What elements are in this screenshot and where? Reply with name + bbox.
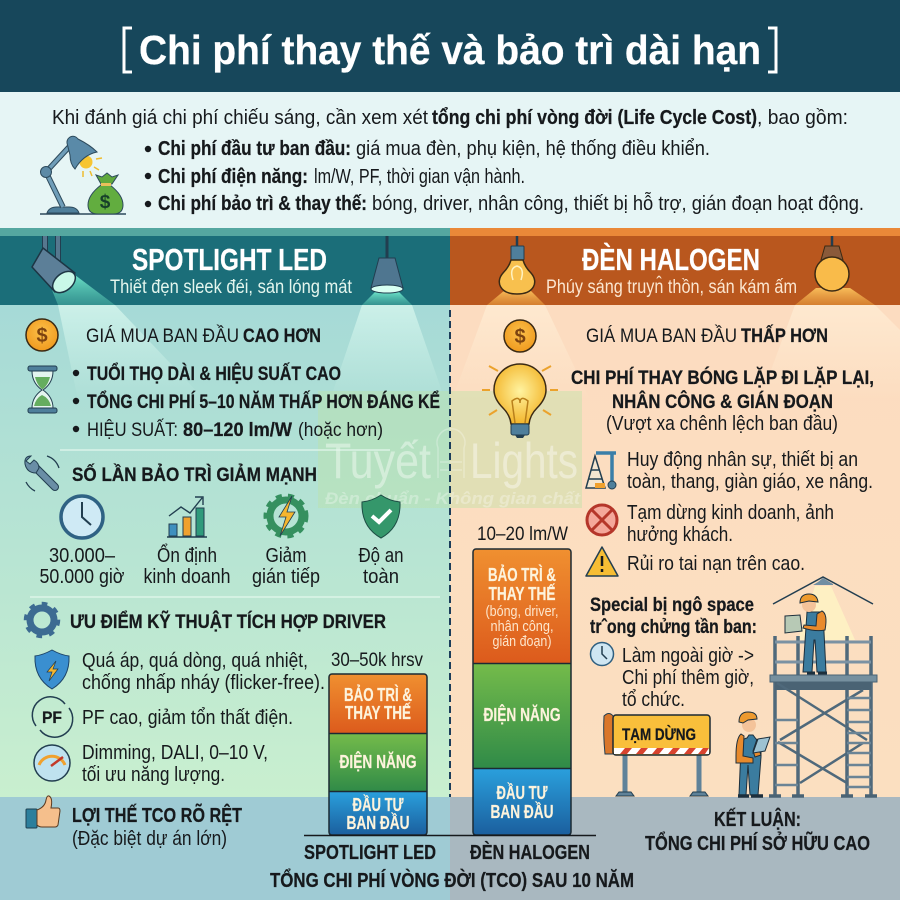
heading: den halogen: ĐÈN HALOGEN: [582, 242, 760, 277]
icon: shield: [362, 495, 400, 538]
bullet list: cost components: lm/W, PF, thời gian vận hành.: [314, 166, 525, 188]
light beams: spotlight: [52, 275, 445, 400]
subheading: halogen: Phúy sáng truyn̂ thồn, sán kám ấm: [546, 276, 797, 298]
group: hours: 30.000–: [49, 545, 116, 567]
icon: frosted bulb: [815, 236, 849, 291]
group: business stability: Ổn định: [157, 543, 217, 567]
bullet list: spotlight benefits: (hoặc hơn): [298, 420, 383, 441]
watermark: Lights: [470, 433, 578, 489]
icon: growth chart: [167, 497, 207, 537]
bar: spotlight led: BẢO TRÌ &: [344, 684, 412, 705]
icon: dimming gauge: [34, 745, 70, 781]
icon: warning triangle: [586, 547, 618, 576]
heading: driver advantages: ƯU ĐIỂM KỸ THUẬT TÍCH HỢP DRIVER: [70, 611, 386, 633]
scaffold: [769, 636, 877, 797]
text: dimming: tối ưu năng lượng.: [82, 764, 225, 786]
intro sentence: [52, 107, 848, 129]
text: special note: trˆong chửng tần ban:: [590, 617, 757, 638]
icon: power factor: PF: [42, 708, 62, 727]
panel: left column background: [0, 305, 450, 797]
icon: coin: [26, 319, 58, 351]
text: conclusion: [645, 807, 870, 855]
panel: introduction: [0, 92, 900, 228]
light beams: halogen: [452, 288, 900, 400]
bar: den halogen: (bóng, driver,: [486, 603, 558, 620]
text: lower price: GIÁ MUA BAN ĐẦU: [586, 325, 737, 347]
group: indirect savings: Giảm: [266, 545, 306, 567]
icon: thumbs up: [26, 796, 60, 828]
title: Chi phí thay thế và bảo trì dài hạn: [139, 27, 761, 73]
text: accident risk: Rủi ro tai nạn trên cao.: [627, 553, 805, 575]
text: lower price: [586, 325, 828, 347]
bar: spotlight led: THAY THẾ: [345, 702, 411, 723]
text: overtime: tổ chức.: [622, 689, 685, 711]
heading: spotlight led: SPOTLIGHT LED: [132, 242, 327, 277]
panel: title bar: [0, 0, 900, 92]
watermark: Tuyết: [325, 433, 431, 489]
text: special note: [590, 595, 757, 638]
panel: halogen header: [450, 228, 900, 400]
group: business stability: [144, 497, 230, 588]
chart: total cost of ownership stacked bars: [270, 524, 634, 892]
icon: clock: [61, 496, 103, 538]
bar: den halogen: nhân công,: [490, 618, 554, 635]
ceiling with lamp: [773, 577, 873, 640]
bullet list: cost components: [145, 138, 864, 215]
text: repeated replacement cost: CHI PHÍ THAY BÓNG LẶP ĐI LẶP LẠI,: [571, 367, 874, 389]
icon: gear with lightning: [266, 496, 306, 536]
bar: den halogen: 10–20 lm/W: [477, 524, 568, 545]
divider: dashed center line: [449, 310, 451, 797]
icon: protection shield: [35, 650, 69, 689]
text: protections: chống nhấp nháy (flicker-free).: [82, 672, 325, 694]
bullet list: cost components: giá mua đèn, phụ kiện, hệ thống điều khiển.: [356, 138, 710, 160]
text: repeated replacement cost: [571, 367, 874, 435]
bullet list: spotlight benefits: HIỆU SUẤT:: [87, 419, 178, 441]
icon: glowing light bulb: [482, 364, 558, 438]
bullet list: cost components: Chi phí điện năng:: [158, 166, 308, 188]
text: repeated replacement cost: NHÂN CÔNG & GIÁN ĐOẠN: [612, 391, 833, 413]
group: hours: [40, 496, 124, 588]
text: overtime: Làm ngoài giờ ->: [622, 645, 754, 667]
illustration: pause barrier sign: TẠM DỪNG: [622, 725, 696, 744]
panel: right bottom band: [450, 797, 900, 900]
bullet list: spotlight benefits: TỔNG CHI PHÍ 5–10 NĂM THẤP HƠN ĐÁNG KỂ: [87, 391, 440, 413]
text: tco advantage: [72, 803, 242, 850]
bullet list: cost components: bóng, driver, nhân công, thiết bị hỗ trợ, gián đoạn hoạt động.: [372, 192, 864, 215]
group: halogen price: [504, 320, 828, 352]
text: power factor: PF cao, giảm tổn thất điện.: [82, 707, 293, 729]
icon: stop sign: [587, 505, 617, 535]
text: special note: Special bị ngô space: [590, 595, 754, 616]
bullet list: spotlight benefits: TUỔI THỌ DÀI & HIỆU SUẤT CAO: [87, 363, 341, 385]
text: higher price: CAO HƠN: [243, 326, 321, 347]
illustration: worker on ground: [736, 712, 770, 796]
text: business pause: hưởng khách.: [627, 524, 733, 546]
icon: ladder and lift: [586, 453, 616, 489]
group: safety: [358, 495, 404, 588]
icon: track spotlight: [32, 236, 79, 297]
group: indirect savings: [252, 496, 320, 588]
heading: maintenance reduced: SỐ LẦN BẢO TRÌ GIẢM MẠNH: [72, 464, 317, 486]
bullet list: spotlight benefits: 80–120 lm/W: [183, 420, 292, 441]
text: protections: [82, 650, 325, 694]
icon: power factor: [32, 697, 73, 737]
text: lower price: THẤP HƠN: [741, 325, 828, 347]
group: business stability: kinh doanh: [144, 566, 230, 588]
text: dimming: Dimming, DALI, 0–10 V,: [82, 742, 268, 764]
bullet list: spotlight benefits: [73, 363, 440, 441]
text: overtime: Chi phí thêm giờ,: [622, 667, 754, 689]
icon: wrench: [25, 456, 59, 491]
icon: hourglass: [28, 366, 57, 413]
watermark: [318, 391, 582, 508]
bullet list: cost components: Chi phí bảo trì & thay thế:: [158, 193, 367, 215]
text: tco advantage: LỢI THẾ TCO RÕ RỆT: [72, 803, 242, 827]
worker: [785, 594, 827, 673]
text: overtime: [622, 645, 754, 711]
bar: spotlight led: [329, 650, 427, 835]
text: tco advantage: (Đặc biệt dự án lớn): [72, 828, 227, 850]
bar: den halogen: ĐIỆN NĂNG: [484, 704, 560, 725]
text: protections: Quá áp, quá dòng, quá nhiệt,: [82, 650, 308, 672]
bar: den halogen: gián đoạn): [492, 633, 552, 650]
bar: den halogen: THAY THẾ: [488, 583, 556, 604]
icon: coin: [504, 320, 536, 352]
bar: spotlight led: 30–50k hrsv: [331, 650, 423, 671]
bar: spotlight led: ĐIỆN NĂNG: [340, 751, 416, 772]
group: spotlight price: [26, 319, 321, 351]
text: higher price: GIÁ MUA BAN ĐẦU: [86, 325, 239, 347]
group: safety: Độ an: [358, 545, 404, 567]
bar: den halogen: BAN ĐẦU: [490, 801, 554, 822]
intro sentence: , bao gồm:: [757, 107, 848, 129]
text: conclusion: KẾT LUẬN:: [714, 807, 801, 831]
text: dimming: [82, 742, 268, 786]
icon: small clock: [590, 642, 614, 666]
group: indirect savings: gián tiếp: [252, 566, 320, 588]
bar: spotlight led: BAN ĐẦU: [346, 812, 410, 833]
chart: total cost of ownership stacked bars: TỔNG CHI PHÍ VÒNG ĐỜI (TCO) SAU 10 NĂM: [270, 868, 634, 892]
icon: coin: $: [36, 325, 48, 347]
subheading: spotlight: Thiết đẹn sleek đéi, sán lóng mát: [110, 277, 353, 298]
text: higher price: [86, 325, 321, 347]
text: repeated replacement cost: (Vượt xa chênh lệch ban đầu): [606, 413, 838, 435]
group: hours: 50.000 giờ: [40, 566, 124, 588]
bar: den halogen: ĐẦU TƯ: [496, 782, 548, 803]
bar: den halogen: [473, 524, 571, 835]
icon: filament bulb: [499, 236, 535, 294]
chart: total cost of ownership stacked bars: ĐÈN HALOGEN: [470, 841, 590, 864]
intro sentence: Khi đánh giá chi phí chiếu sáng, cần xem xét: [52, 107, 428, 129]
icon: gear: [26, 604, 58, 636]
icon: coin: $: [514, 326, 526, 348]
icon: pendant lamp: [371, 236, 403, 293]
text: mobilize staff: toàn, thang, giàn giáo, xe nâng.: [627, 471, 873, 493]
text: mobilize staff: Huy động nhân sự, thiết bị an: [627, 449, 858, 471]
watermark: Đèn chuẩn - Không gian chất: [325, 489, 581, 508]
text: mobilize staff: [627, 449, 873, 493]
illustration: worker on scaffold under lamp: [769, 577, 877, 797]
panel: right column background: [450, 305, 900, 797]
bar: spotlight led: ĐẦU TƯ: [352, 794, 404, 815]
bar: den halogen: BẢO TRÌ &: [488, 564, 556, 585]
panel: spotlight header: [0, 228, 450, 400]
text: business pause: Tạm dừng kinh doanh, ảnh: [627, 502, 834, 524]
illustration: pause barrier sign: [604, 714, 710, 796]
panel: left bottom band: [0, 797, 450, 900]
bullet list: cost components: Chi phí đầu tư ban đầu:: [158, 138, 351, 160]
chart: total cost of ownership stacked bars: SPOTLIGHT LED: [304, 842, 436, 864]
intro sentence: tổng chi phí vòng đời (Life Cycle Cost): [432, 107, 757, 129]
text: business pause: [627, 502, 834, 546]
icon: desk lamp and money bag: $: [100, 192, 111, 213]
group: safety: toàn: [363, 566, 399, 588]
icon: desk lamp and money bag: [40, 136, 126, 214]
